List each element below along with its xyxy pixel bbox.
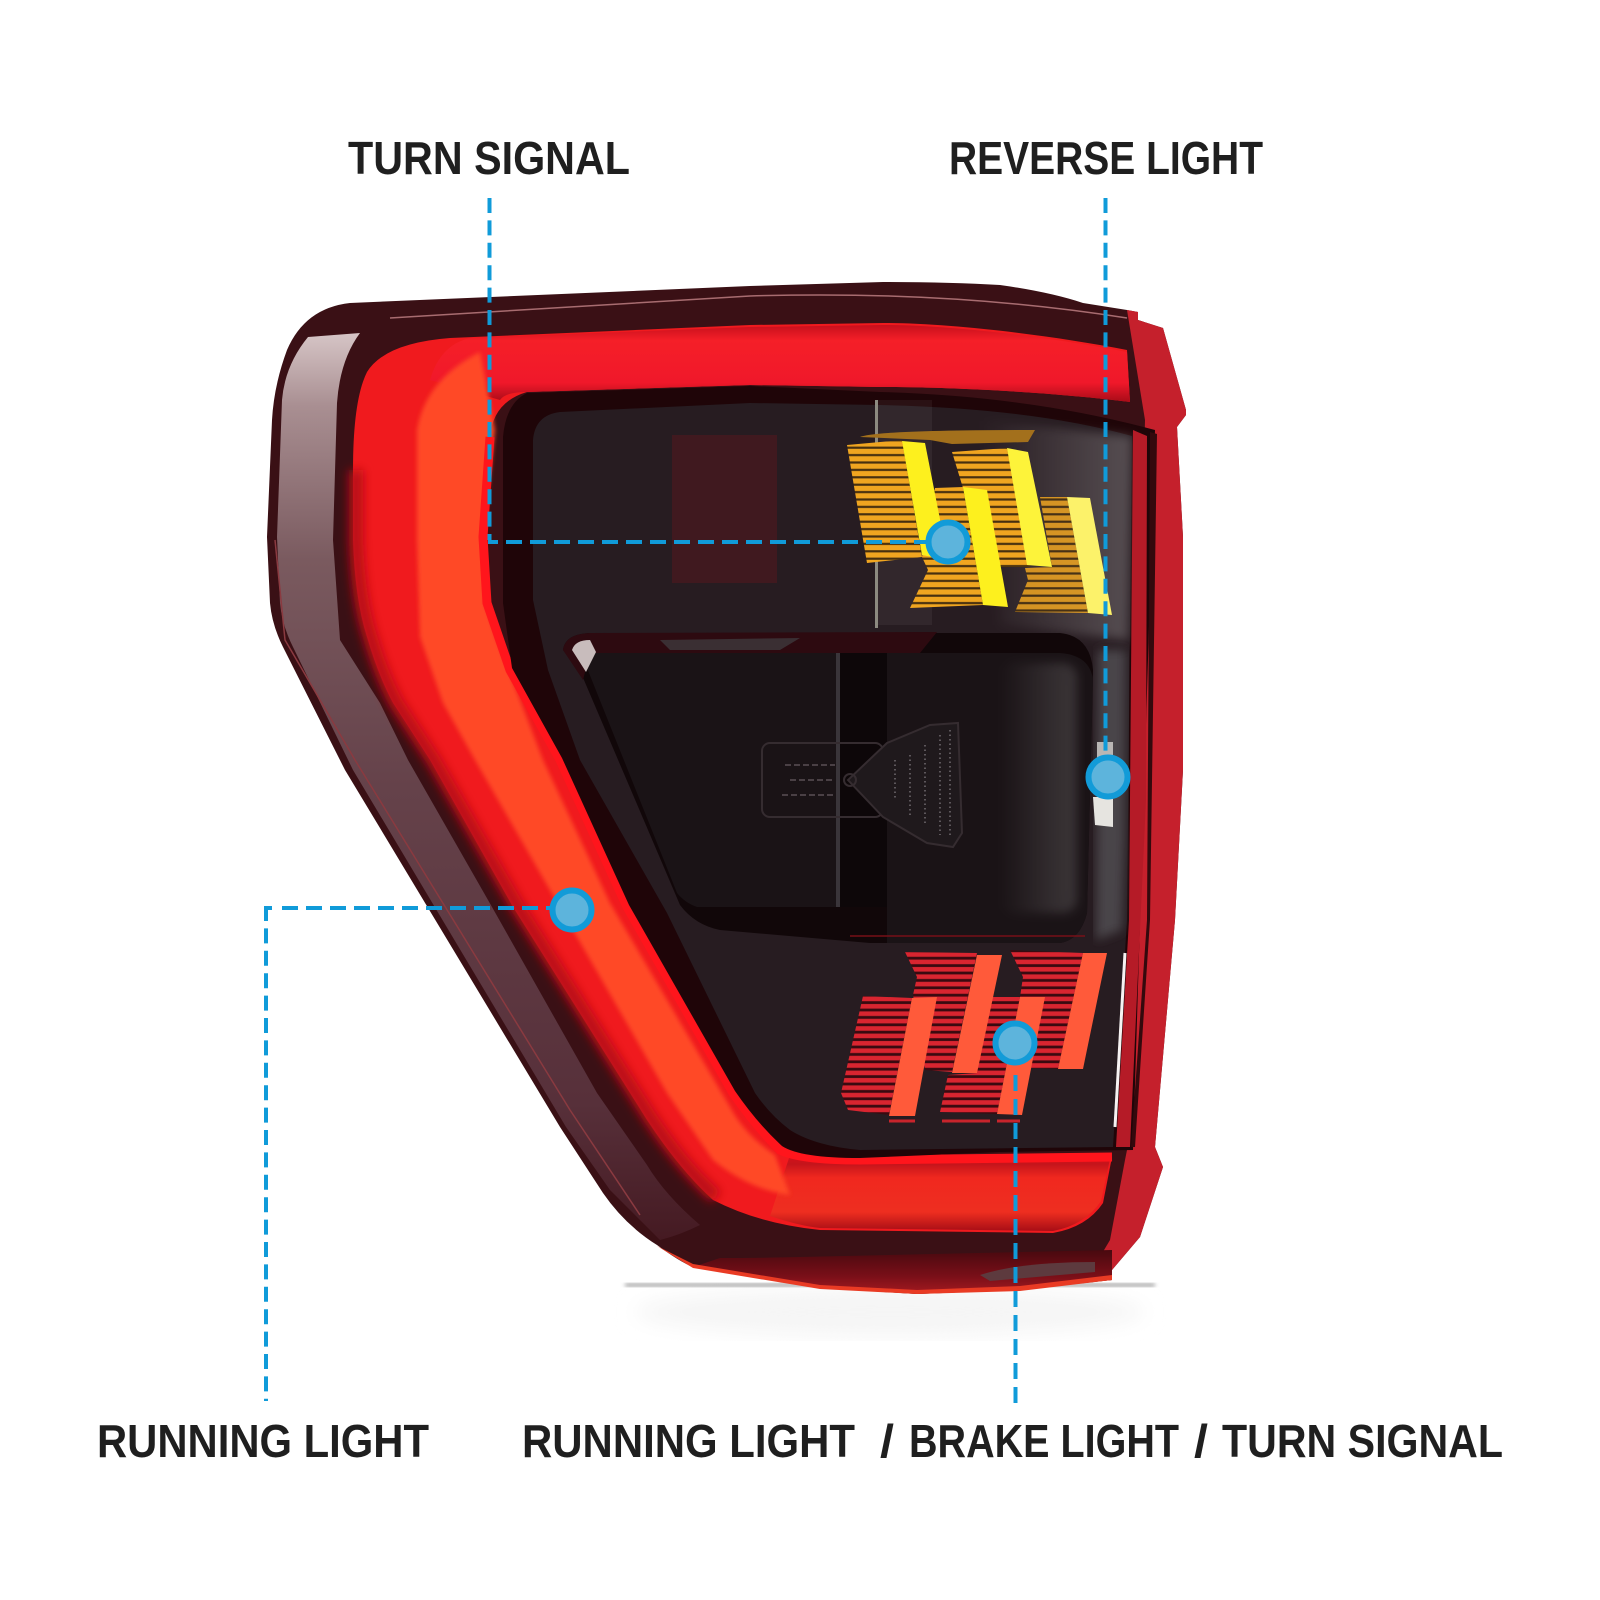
label: running, brake and turn: RUNNING LIGHT [522,1415,855,1467]
marker: brake light [996,1024,1034,1062]
label: reverse light: REVERSE LIGHT [949,132,1263,184]
right red strips [1116,430,1157,1147]
smoked panel outer frame [503,386,1155,1158]
marker: turn signal [928,522,968,562]
lower panel separator [850,935,1085,937]
label: running light: RUNNING LIGHT [97,1415,429,1467]
lamp body [267,282,1186,1294]
tail light illustration [267,282,1186,1294]
edge line in the grey band [275,540,640,1215]
label: running, brake and turn: TURN SIGNAL [1222,1415,1503,1467]
orange bottom rim [657,1246,1112,1294]
bottom band [770,1155,1110,1231]
reverse lamp glint [1093,742,1113,827]
label: running, brake and turn: / [1194,1415,1208,1467]
amber top strips [860,430,1035,444]
leader: brake and turn combination [1014,1075,1018,1403]
label: running, brake and turn [522,1415,1503,1467]
label: turn signal: TURN SIGNAL [348,132,630,184]
red stop panel square [672,435,777,583]
floor shadow [625,1283,1155,1336]
side white sliver [1115,953,1125,1127]
leader: turn signal [488,198,930,542]
orange core strip [417,352,790,1195]
centre plate [563,632,1093,943]
top edge highlight [390,295,1127,318]
red brake and running block [841,950,1107,1121]
amber turn signal block [847,430,1112,615]
embossed reverse-lens emblem [762,723,962,847]
running light band [353,323,1130,1233]
marker: reverse light [1088,758,1128,796]
top band [430,325,1130,402]
panel light reflections [875,400,1132,940]
leader: running light [264,906,552,1401]
shaded outer edge of left band [356,470,716,1197]
smoked panel [533,403,1132,1150]
bottom housing rim [693,1250,1112,1294]
label: running, brake and turn: BRAKE LIGHT [909,1415,1179,1467]
leader: reverse light [1104,198,1108,758]
grey translucent outer band [277,333,700,1240]
label: running, brake and turn: / [880,1415,894,1467]
crimson right rim [1085,310,1186,1282]
smoke reflection on the rim [980,1262,1095,1281]
marker: running light [552,890,592,930]
bright inner edge [483,437,1112,1160]
